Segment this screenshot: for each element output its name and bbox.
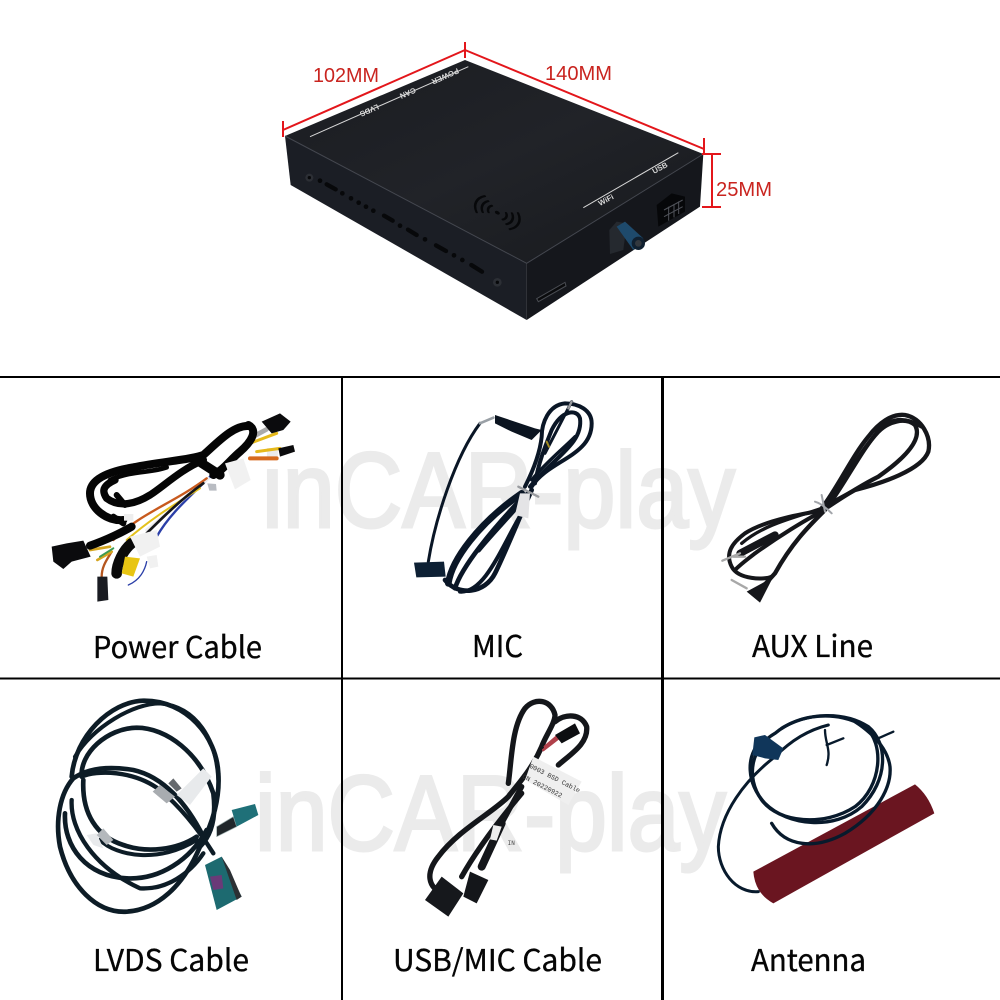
panel: antenna illustration — [718, 716, 934, 903]
audio jack plugs — [722, 553, 747, 588]
small tag — [490, 825, 502, 841]
left connector — [52, 541, 91, 569]
grid lines — [0, 377, 1000, 1000]
device box illustration: USB — [651, 160, 670, 176]
device box illustration: CAN — [398, 86, 417, 101]
cable tag — [515, 493, 530, 518]
small white-wire connector — [555, 723, 580, 743]
label: Power Cable: Power Cable — [93, 623, 262, 667]
panel: LVDS cable illustration — [58, 701, 258, 912]
label: Antenna: Antenna — [751, 936, 866, 980]
dimension: 25MM: 25MM — [716, 179, 772, 201]
USB connector — [425, 877, 463, 917]
top right connector — [262, 413, 291, 433]
FAKRA connector — [752, 735, 783, 760]
small connector — [278, 445, 295, 457]
dimension: 140MM: 140MM — [545, 63, 612, 85]
lower connector — [97, 577, 108, 602]
label: LVDS Cable: LVDS Cable — [93, 936, 249, 980]
audio jack — [463, 872, 488, 903]
cable tie — [815, 495, 832, 513]
device box illustration: POWER — [430, 66, 460, 86]
red and white wires — [543, 737, 558, 750]
top connector — [495, 415, 542, 440]
cable tags — [124, 458, 251, 568]
dimension line: 102MM — [283, 42, 465, 137]
small FAKRA connector — [217, 817, 237, 837]
panel: power cable illustration — [52, 413, 295, 602]
label: MIC: MIC — [472, 622, 523, 666]
cable tag with printed text: CN 20220922 — [521, 773, 564, 800]
watermark: upper row: inCAR-play — [262, 430, 735, 550]
bottom connector — [414, 562, 446, 577]
panel: device with dimensions — [283, 42, 772, 320]
dimension: 102MM: 102MM — [313, 65, 379, 87]
cable labels and sleeves — [177, 768, 212, 805]
device box illustration: WiFi — [597, 192, 615, 208]
yellow RCA plug — [122, 557, 140, 577]
label: AUX Line: AUX Line — [752, 622, 873, 666]
panel: USB/MIC cable illustration — [425, 701, 587, 917]
dimension line: 140MM — [465, 50, 704, 155]
device box illustration — [285, 60, 703, 320]
cable tag with printed text: 0003 BSD Cable — [528, 762, 582, 795]
cable tag with printed text — [521, 757, 582, 806]
device box illustration: LVDS — [358, 102, 380, 118]
label: USB/MIC Cable: USB/MIC Cable — [393, 936, 602, 980]
panel: USB/MIC cable illustration: IN — [508, 840, 515, 847]
panel: AUX line illustration — [722, 415, 929, 603]
panel: MIC cable illustration — [414, 402, 592, 592]
dimension line: 25MM — [702, 154, 721, 207]
large FAKRA connector with purple insert — [205, 857, 242, 910]
watermark: lower row: inCAR-play — [255, 753, 726, 873]
